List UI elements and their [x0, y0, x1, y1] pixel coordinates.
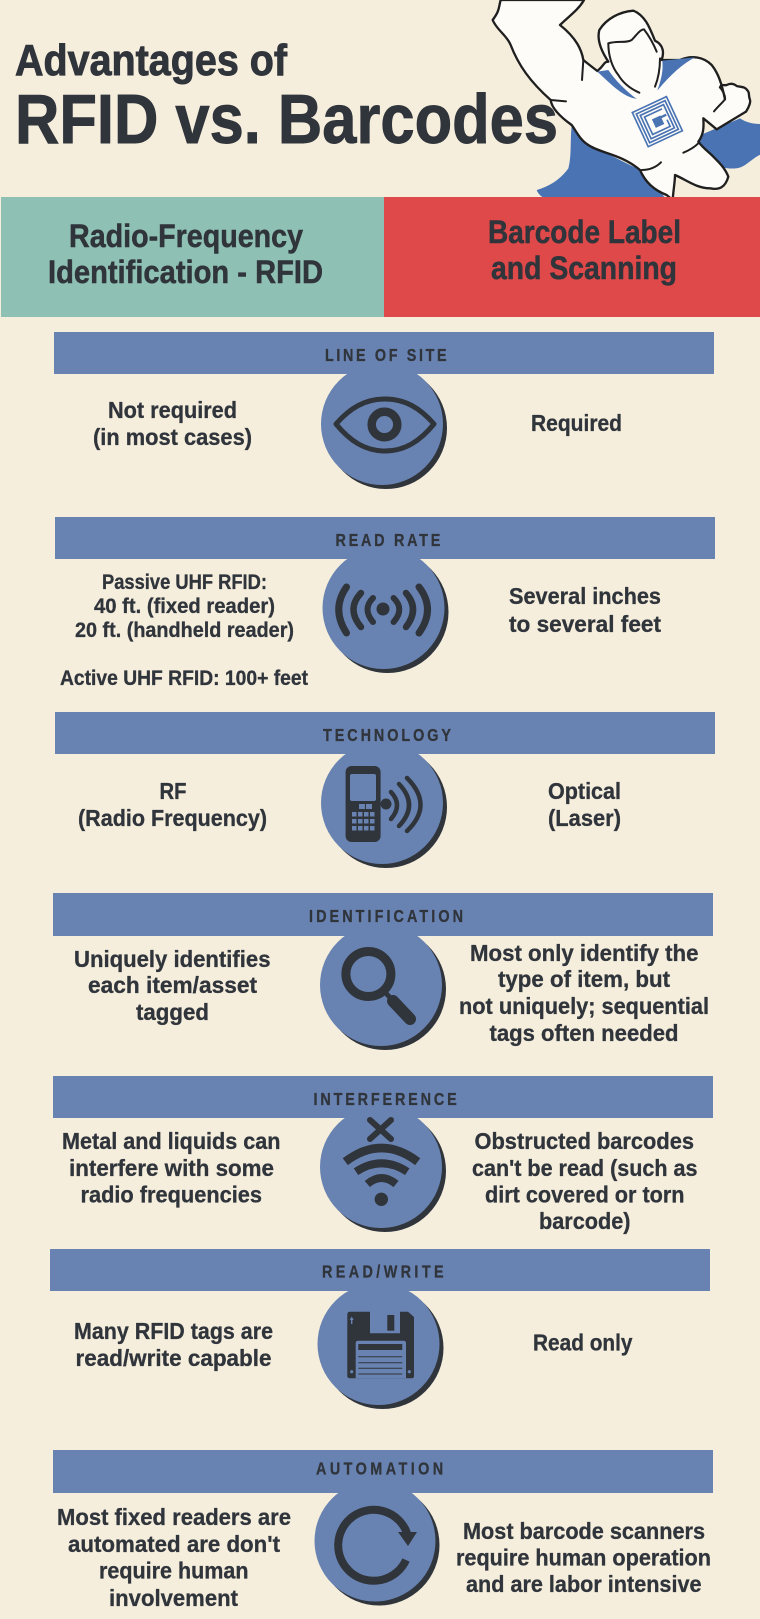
- barcode text: (Laser): [548, 805, 621, 831]
- barcode text: not uniquely; sequential: [459, 993, 709, 1019]
- heading bar: read/write: [50, 1249, 710, 1291]
- barcode text: Obstructed barcodes: [474, 1128, 694, 1154]
- RFID header text: [48, 218, 323, 290]
- panel: automation: [53, 1450, 713, 1611]
- RFID text: [74, 1318, 273, 1371]
- RFID text: [93, 397, 252, 450]
- Barcode header text: [488, 214, 681, 286]
- barcode text: [548, 778, 621, 831]
- icon: magnifier: [346, 952, 410, 1019]
- barcode text: require human operation: [456, 1544, 711, 1570]
- icon: rotate arrow: [338, 1510, 417, 1581]
- heading bar: identification: IDENTIFICATION: [309, 907, 463, 926]
- barcode text: [459, 940, 709, 1046]
- circle badge: [321, 742, 447, 868]
- heading bar: automation: [53, 1450, 713, 1493]
- superhero face and body lines: [551, 29, 725, 170]
- barcode text: Most only identify the: [470, 940, 698, 966]
- RFID text: interfere with some: [69, 1155, 274, 1181]
- RFID text: [60, 571, 308, 690]
- RFID text: (in most cases): [93, 424, 252, 450]
- RFID text: read/write capable: [76, 1345, 272, 1371]
- icon: phone with waves: [346, 766, 420, 842]
- heading bar: line of site: LINE OF SITE: [325, 346, 447, 365]
- RFID header text: Identification - RFID: [48, 254, 323, 290]
- RFID text: Active UHF RFID: 100+ feet: [60, 667, 308, 690]
- Barcode header text: Barcode Label: [488, 214, 681, 250]
- heading bar: line of site: [54, 332, 714, 374]
- RFID text: Metal and liquids can: [62, 1128, 280, 1154]
- RFID text: involvement: [109, 1585, 238, 1611]
- icon: floppy disk: [347, 1312, 414, 1378]
- barcode text: Required: [531, 410, 622, 436]
- circle badge: [318, 1283, 444, 1409]
- icon: wifi with cross: [345, 1120, 418, 1206]
- RFID text: 40 ft. (fixed reader): [94, 595, 275, 618]
- RFID text: [74, 946, 270, 1025]
- barcode text: and are labor intensive: [466, 1571, 702, 1597]
- barcode text: barcode): [539, 1208, 630, 1234]
- RFID text: [57, 1504, 291, 1611]
- panel: line of site: [54, 332, 714, 489]
- RFID text: Not required: [108, 397, 237, 423]
- icon: radio signal: [339, 587, 428, 633]
- circle badge: [314, 1480, 440, 1606]
- heading bar: technology: [55, 712, 715, 754]
- barcode text: Most barcode scanners: [463, 1518, 705, 1544]
- heading bar: identification: [53, 893, 713, 936]
- panel: identification: [53, 893, 713, 1050]
- RFID text: RF: [160, 778, 186, 804]
- barcode text: Several inches: [509, 583, 661, 609]
- title: [15, 36, 558, 158]
- superhero body: [493, 0, 750, 200]
- RFID text: Passive UHF RFID:: [102, 571, 267, 594]
- RFID text: Most fixed readers are: [57, 1504, 291, 1530]
- heading bar: read rate: [55, 517, 715, 559]
- barcode text: [456, 1518, 711, 1597]
- circle badge: [321, 363, 447, 489]
- RFID text: require human: [99, 1558, 248, 1584]
- RFID text: tagged: [136, 999, 209, 1025]
- barcode text: [472, 1128, 698, 1234]
- heading bar: automation: AUTOMATION: [316, 1459, 443, 1479]
- heading bar: read/write: READ/WRITE: [322, 1262, 444, 1282]
- title line: RFID vs. Barcodes: RFID vs. Barcodes: [15, 80, 558, 158]
- RFID text: [78, 778, 267, 831]
- panel: interference: [53, 1076, 713, 1234]
- RFID text: (Radio Frequency): [78, 805, 267, 831]
- RFID text: [62, 1128, 280, 1208]
- icon: eye: [336, 399, 434, 451]
- circle badge: [320, 924, 446, 1050]
- illustration: RFID superhero: [493, 0, 760, 200]
- RFID text: 20 ft. (handheld reader): [75, 619, 294, 642]
- barcode text: Optical: [548, 778, 621, 804]
- heading bar: interference: [53, 1076, 713, 1118]
- RFID text: automated are don't: [68, 1531, 280, 1557]
- barcode text: to several feet: [509, 611, 661, 637]
- barcode text: dirt covered or torn: [485, 1182, 684, 1208]
- panel: read rate: [55, 517, 715, 690]
- RFID text: Many RFID tags are: [74, 1318, 273, 1344]
- circle badge: [322, 547, 448, 673]
- title line: Advantages of: Advantages of: [15, 36, 287, 85]
- superhero cape: [537, 118, 760, 200]
- heading bar: technology: TECHNOLOGY: [323, 726, 451, 745]
- barcode text: Read only: [533, 1330, 633, 1356]
- heading bar: interference: INTERFERENCE: [314, 1090, 457, 1109]
- barcode text: type of item, but: [498, 966, 670, 992]
- superhero collar: [597, 57, 695, 99]
- panel: read/write: [50, 1249, 710, 1409]
- Barcode header text: and Scanning: [491, 250, 677, 286]
- barcode text: tags often needed: [490, 1020, 678, 1046]
- panel: RFID column header: [1, 197, 384, 317]
- heading bar: read rate: READ RATE: [336, 531, 440, 550]
- barcode text: [509, 583, 661, 637]
- barcode text: can't be read (such as: [472, 1155, 698, 1181]
- panel: Barcode column header: [384, 197, 760, 317]
- superhero chest RFID tag: [632, 97, 682, 147]
- circle badge: [320, 1106, 446, 1232]
- RFID text: each item/asset: [88, 972, 257, 998]
- RFID header text: Radio-Frequency: [69, 218, 303, 254]
- RFID text: Uniquely identifies: [74, 946, 270, 972]
- panel: technology: [55, 712, 715, 868]
- RFID text: radio frequencies: [80, 1182, 262, 1208]
